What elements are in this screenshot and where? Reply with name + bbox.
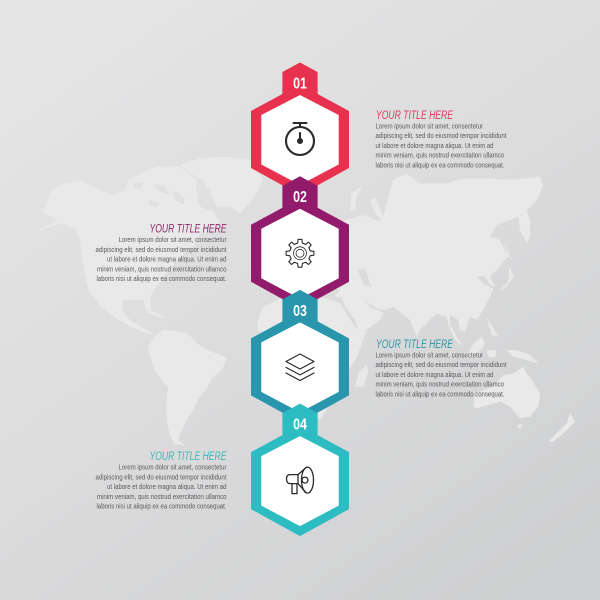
world map (37, 157, 575, 445)
title 3: YOUR TITLE HERE (376, 339, 453, 351)
body 4: minim veniam, quis nostrud exercitation ullamco (97, 494, 227, 501)
number 02: 02 (293, 189, 307, 206)
body 4: ut labore et dolore magna aliqua. Ut enim ad (107, 484, 227, 491)
body 3 (376, 352, 507, 398)
step 4: teal hexagon (251, 404, 349, 536)
title 1: YOUR TITLE HERE (376, 110, 453, 122)
inner white hexagon 3 (261, 322, 339, 412)
title 4: YOUR TITLE HERE (150, 451, 227, 463)
inner white hexagon 2 (261, 209, 339, 299)
map: Greenland (180, 157, 263, 213)
body 4: Lorem ipsum dolor sit amet, consectetur (118, 465, 227, 472)
text block 1 (376, 110, 507, 170)
body 1: adipiscing elit, sed do eiusmod tempor incididunt (376, 133, 507, 140)
body 2: adipiscing elit, sed do eiusmod tempor incididunt (96, 247, 227, 254)
body 1: Lorem ipsum dolor sit amet, consectetur (376, 124, 484, 130)
body 2: Lorem ipsum dolor sit amet, consectetur (118, 237, 227, 244)
body 1: minim veniam, quis nostrud exercitation ullamco (376, 153, 504, 160)
body 2 (96, 237, 227, 283)
text block 4 (96, 451, 227, 511)
map: North America (37, 167, 220, 335)
body 3: minim veniam, quis nostrud exercitation ullamco (376, 382, 504, 389)
body 3: ut labore et dolore magna aliqua. Ut enim ad (376, 372, 494, 379)
map: Africa (257, 290, 367, 420)
map: Tasmania and New Zealand (517, 413, 575, 442)
number 04: 04 (293, 417, 307, 434)
map: Eurasia (310, 173, 543, 347)
body 1: laboris nisi ut aliquip ex ea commodo consequat. (376, 162, 505, 170)
map: Arctic and Scandinavian islands (350, 185, 383, 220)
number 03: 03 (293, 303, 307, 320)
title 2: YOUR TITLE HERE (150, 224, 227, 236)
icon: layers (286, 354, 314, 380)
text block 3 (376, 339, 507, 398)
step 3: blue hexagon (251, 290, 349, 422)
body 4: laboris nisi ut aliquip ex ea commodo consequat. (96, 504, 227, 511)
body 3: Lorem ipsum dolor sit amet, consectetur (376, 352, 484, 360)
map: Japan (498, 240, 514, 292)
body 2: ut labore et dolore magna aliqua. Ut enim ad (107, 257, 227, 264)
inner white hexagon 1 (261, 95, 339, 185)
number 01: 01 (293, 76, 307, 92)
body 3: laboris nisi ut aliquip ex ea commodo consequat. (376, 392, 505, 398)
step 2: purple hexagon (251, 176, 349, 309)
body 4: adipiscing elit, sed do eiusmod tempor incididunt (96, 474, 227, 482)
body 2: laboris nisi ut aliquip ex ea commodo consequat. (96, 276, 227, 283)
body 1: ut labore et dolore magna aliqua. Ut enim ad (376, 143, 494, 150)
map: South America (148, 330, 227, 445)
inner white hexagon 4 (261, 436, 339, 526)
map: Australia (473, 367, 540, 418)
map: Madagascar (355, 365, 368, 387)
icon: gear (286, 239, 314, 267)
step 1: red hexagon (251, 62, 349, 195)
body 1 (376, 124, 507, 170)
map: Southeast Asia islands (463, 318, 538, 363)
body 3: adipiscing elit, sed do eiusmod tempor incididunt (376, 362, 507, 369)
icon: megaphone (286, 467, 314, 494)
map: Cuba (143, 311, 167, 318)
body 4 (96, 465, 227, 511)
body 2: minim veniam, quis nostrud exercitation ullamco (97, 266, 227, 274)
icon: stopwatch (286, 123, 314, 155)
text block 2 (96, 224, 227, 283)
